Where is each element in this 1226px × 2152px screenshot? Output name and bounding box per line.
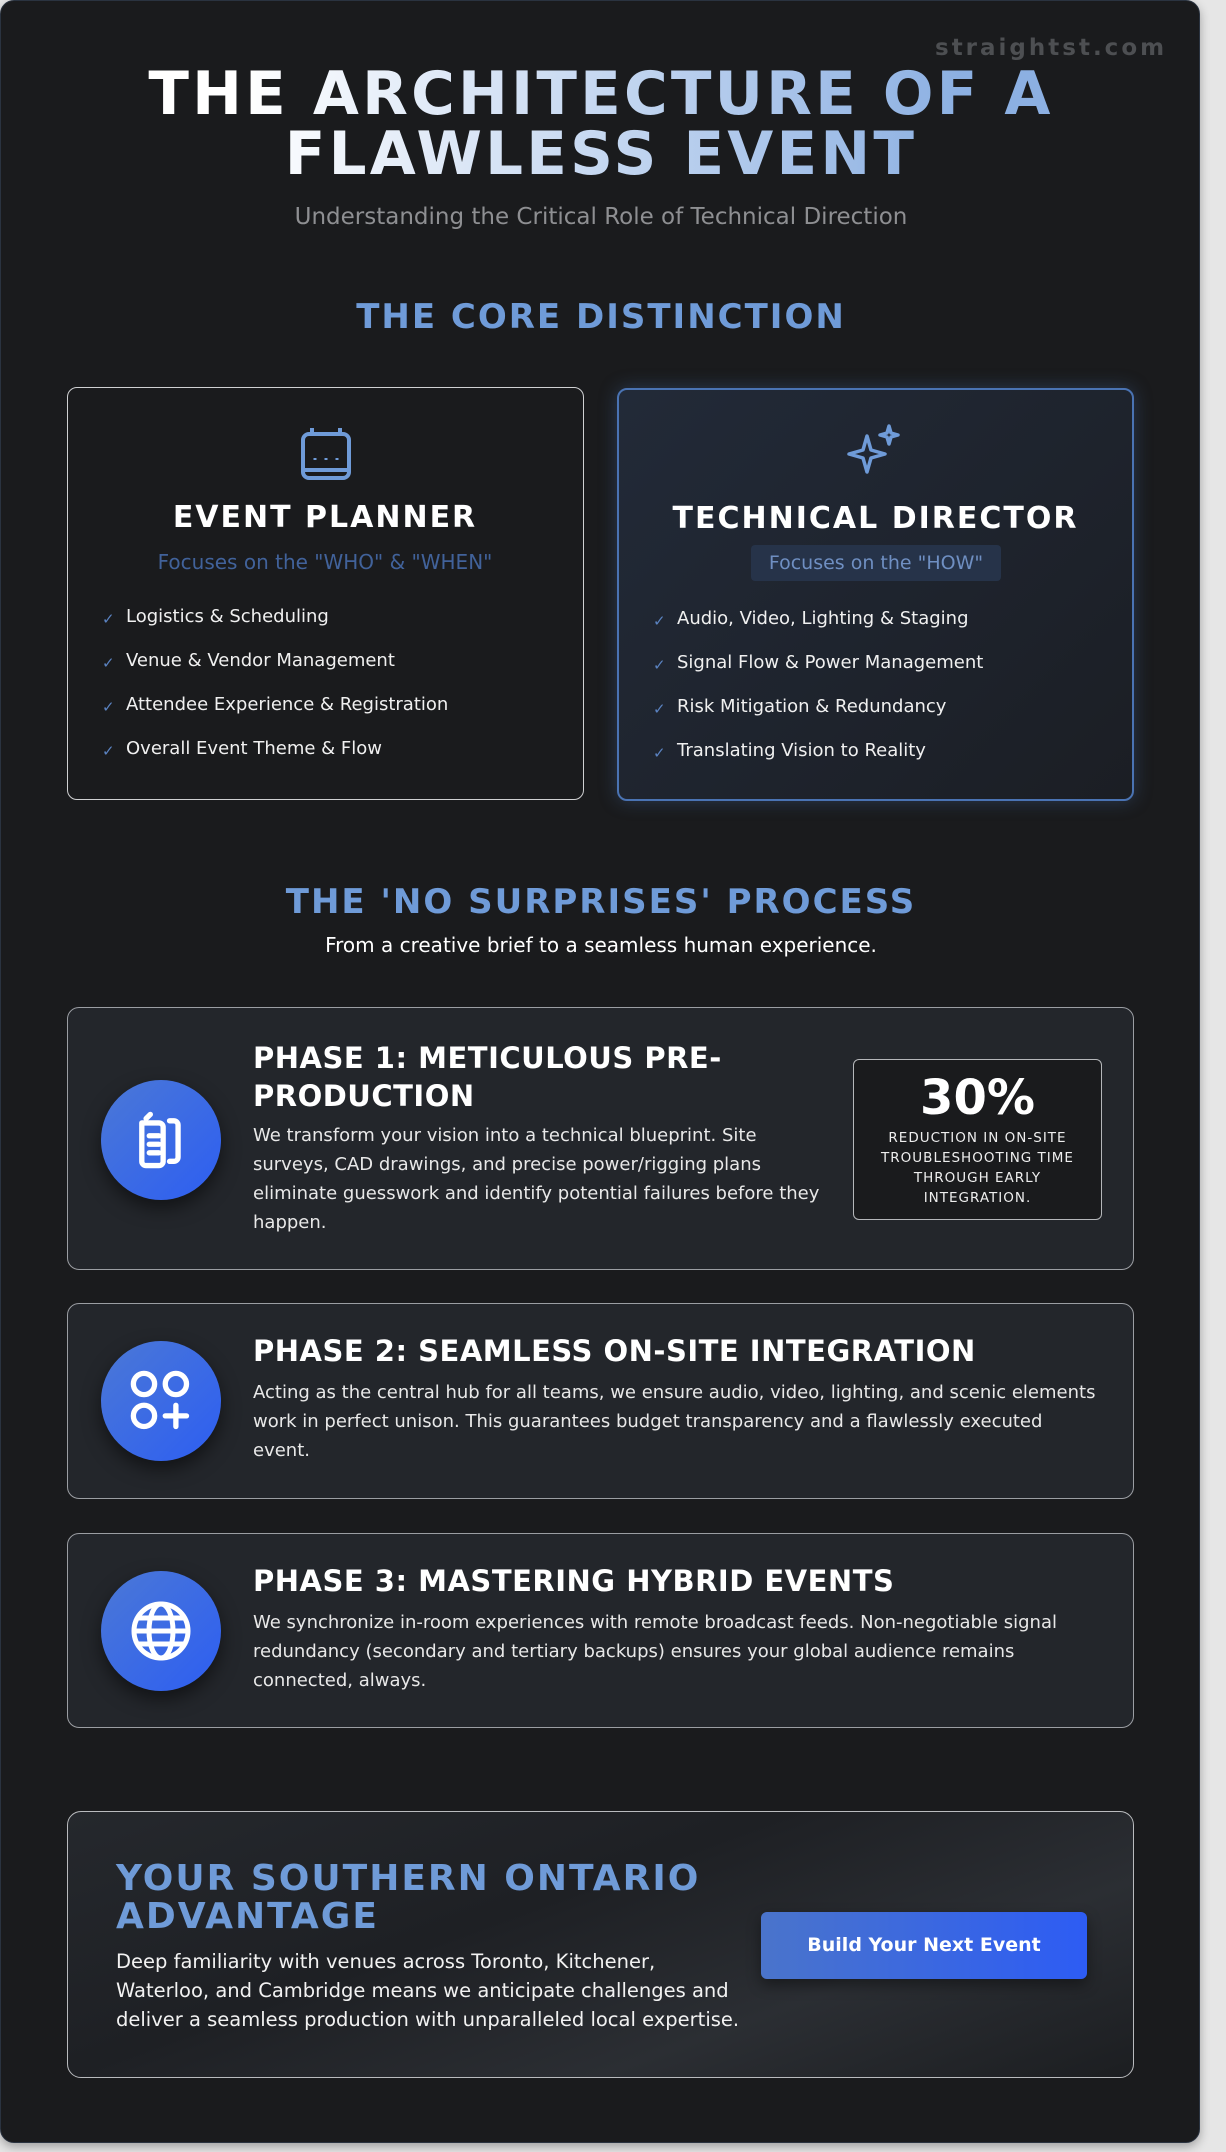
phase 1 body: surveys, CAD drawings, and precise power/rigging plans bbox=[253, 1154, 761, 1175]
list: director duties: ✓ bbox=[653, 612, 666, 630]
list: planner duties bbox=[102, 606, 448, 760]
phase 1 card bbox=[67, 1007, 1134, 1270]
panel: southern ontario advantage bbox=[67, 1811, 1134, 2078]
list: planner duties: Venue & Vendor Management bbox=[126, 650, 395, 671]
cta body bbox=[116, 1950, 739, 2031]
icon: globe bbox=[101, 1571, 221, 1691]
phase 1 body: We transform your vision into a technical blueprint. Site bbox=[253, 1125, 757, 1146]
heading: process: THE 'NO SURPRISES' PROCESS bbox=[286, 882, 916, 922]
phase 2 card bbox=[67, 1303, 1134, 1499]
list: planner duties: ✓ bbox=[102, 654, 115, 672]
phase 2 body: work in perfect unison. This guarantees budget transparency and a flawlessly executed bbox=[253, 1411, 1042, 1432]
button: Build Your Next Event bbox=[807, 1934, 1041, 1956]
phase 3 body: connected, always. bbox=[253, 1670, 426, 1691]
focus pill bbox=[751, 545, 1001, 581]
phase 3 body bbox=[253, 1612, 1057, 1691]
panel: technical director bbox=[617, 388, 1134, 801]
heading: core distinction: THE CORE DISTINCTION bbox=[356, 297, 846, 337]
phase 1 body: happen. bbox=[253, 1212, 326, 1233]
list: director duties: ✓ bbox=[653, 700, 666, 718]
panel: event planner bbox=[67, 387, 584, 800]
list: director duties: Risk Mitigation & Redundancy bbox=[677, 696, 946, 717]
phase 3 body: redundancy (secondary and tertiary backups) ensures your global audience remains bbox=[253, 1641, 1014, 1662]
stat callout: 30% bbox=[853, 1059, 1102, 1220]
cta body: deliver a seamless production with unparalleled local expertise. bbox=[116, 2008, 739, 2031]
phase 3 body: We synchronize in-room experiences with remote broadcast feeds. Non-negotiable signal bbox=[253, 1612, 1057, 1633]
icon: clipboard bbox=[101, 1080, 221, 1200]
phase 3 title: PHASE 3: MASTERING HYBRID EVENTS bbox=[253, 1564, 894, 1598]
focus pill: Focuses on the "HOW" bbox=[769, 552, 983, 574]
title bbox=[1, 65, 1201, 185]
phase 3 card bbox=[67, 1533, 1134, 1728]
watermark: straightst.com bbox=[935, 35, 1167, 61]
list: director duties: ✓ bbox=[653, 744, 666, 762]
focus text: Focuses on the "WHO" & "WHEN" bbox=[158, 550, 492, 574]
cta heading: ADVANTAGE bbox=[116, 1896, 379, 1937]
title: FLAWLESS EVENT bbox=[285, 120, 917, 189]
cta body: Deep familiarity with venues across Toronto, Kitchener, bbox=[116, 1950, 655, 1973]
list: planner duties: ✓ bbox=[102, 610, 115, 628]
phase 1 title: PRODUCTION bbox=[253, 1079, 475, 1113]
subtitle: Understanding the Critical Role of Technical Direction bbox=[295, 204, 907, 230]
list: planner duties: Logistics & Scheduling bbox=[126, 606, 329, 627]
cta body: Waterloo, and Cambridge means we anticipate challenges and bbox=[116, 1979, 729, 2002]
list: director duties bbox=[653, 608, 983, 762]
list: planner duties: Attendee Experience & Registration bbox=[126, 694, 448, 715]
phase 2 body: event. bbox=[253, 1440, 310, 1461]
phase 2 title: PHASE 2: SEAMLESS ON-SITE INTEGRATION bbox=[253, 1334, 976, 1368]
icon: sparkles bbox=[847, 424, 900, 474]
list: planner duties: ✓ bbox=[102, 742, 115, 760]
cta heading bbox=[116, 1858, 700, 1937]
phase 1 body: eliminate guesswork and identify potential failures before they bbox=[253, 1183, 819, 1204]
icon: modules bbox=[101, 1341, 221, 1461]
process subtitle: From a creative brief to a seamless human experience. bbox=[325, 933, 877, 957]
list: planner duties: ✓ bbox=[102, 698, 115, 716]
phase 2 body: Acting as the central hub for all teams, we ensure audio, video, lighting, and scenic elements bbox=[253, 1382, 1095, 1403]
list: director duties: Translating Vision to Reality bbox=[677, 740, 926, 761]
list: director duties: ✓ bbox=[653, 656, 666, 674]
phase 1 title bbox=[253, 1041, 722, 1113]
stat callout: 30%: REDUCTION IN ON-SITE TROUBLESHOOTING TIME THROUGH EARLY INTEGRATION. bbox=[881, 1130, 1074, 1206]
phase 1 title: PHASE 1: METICULOUS PRE- bbox=[253, 1041, 722, 1075]
cta heading: YOUR SOUTHERN ONTARIO bbox=[116, 1858, 700, 1899]
icon: calendar bbox=[301, 428, 351, 480]
list: planner duties: Overall Event Theme & Flow bbox=[126, 738, 382, 759]
stat callout: 30%: 30% bbox=[920, 1070, 1035, 1126]
list: director duties: Audio, Video, Lighting & Staging bbox=[677, 608, 968, 629]
heading: technical director: TECHNICAL DIRECTOR bbox=[673, 501, 1078, 536]
phase 1 body bbox=[253, 1125, 819, 1233]
button bbox=[761, 1912, 1087, 1979]
list: director duties: Signal Flow & Power Management bbox=[677, 652, 983, 673]
title: THE ARCHITECTURE OF A bbox=[148, 60, 1054, 129]
phase 2 body bbox=[253, 1382, 1095, 1461]
heading: event planner: EVENT PLANNER bbox=[173, 500, 477, 535]
